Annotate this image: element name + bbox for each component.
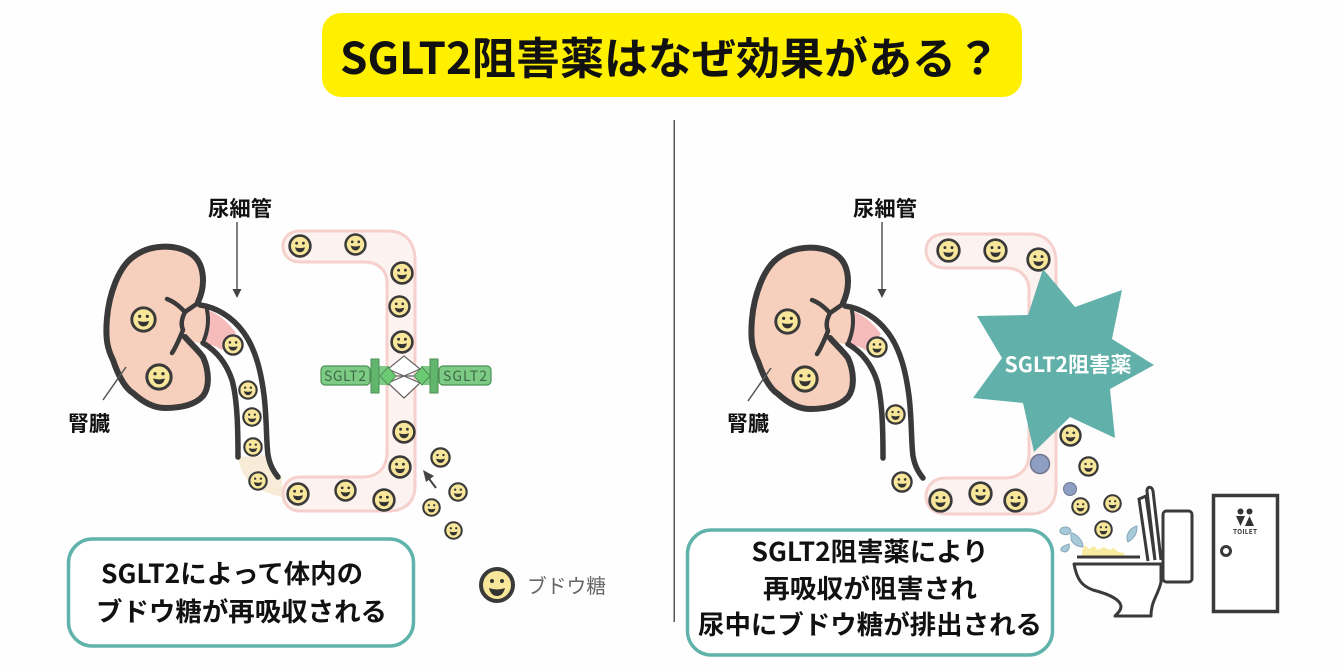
icon: toilet door: [1214, 496, 1278, 612]
SGLT2 transporters: [321, 356, 491, 398]
glucose molecules, right: [776, 240, 1121, 538]
icon: toilet door: TOILET: [1233, 526, 1257, 536]
label: kidney: 腎臓: [68, 408, 110, 438]
label: renal tubule: 尿細管: [853, 193, 917, 223]
label: kidney: [68, 367, 126, 438]
renal tubule: [926, 234, 1056, 514]
arrow: renal tubule pointer: [232, 222, 242, 298]
kidney with ureter: [751, 248, 923, 478]
star: SGLT2 inhibitor: SGLT2阻害薬: [1004, 349, 1132, 379]
callout: SGLT2 reabsorption: ブドウ糖が再吸収される: [96, 592, 387, 629]
callout: SGLT2 reabsorption: SGLT2によって体内の: [101, 554, 363, 591]
label: kidney: [727, 368, 771, 438]
callout: SGLT2 inhibitor effect: 尿中にブドウ糖が排出される: [698, 605, 1042, 642]
label: renal tubule: 尿細管: [208, 193, 272, 223]
callout: SGLT2 reabsorption: [68, 539, 414, 646]
icon: toilet: [1060, 487, 1192, 616]
arrow: reabsorption: [423, 470, 436, 488]
legend: glucose: [481, 569, 606, 601]
SGLT2 transporters: SGLT2: [324, 366, 366, 386]
panel: right, SGLT2 inhibitor: [688, 193, 1278, 655]
callout: SGLT2 inhibitor effect: [688, 530, 1052, 655]
blocked glucose: blue dots: [1030, 454, 1076, 496]
renal tubule: [283, 231, 415, 511]
callout: SGLT2 inhibitor effect: 再吸収が阻害され: [763, 569, 977, 606]
callout: SGLT2 inhibitor effect: SGLT2阻害薬により: [752, 532, 988, 569]
SGLT2 transporters: SGLT2: [443, 366, 487, 386]
glucose molecules, left: [132, 235, 467, 539]
arrow: renal tubule pointer: [878, 222, 886, 298]
kidney with ureter: [106, 247, 282, 497]
title: SGLT2阻害薬はなぜ効果がある？: [340, 23, 1000, 87]
star: SGLT2 inhibitor: [973, 269, 1154, 452]
panel: left, SGLT2 reabsorption: [68, 193, 606, 646]
legend: glucose: ブドウ糖: [527, 570, 606, 599]
label: kidney: 腎臓: [727, 408, 769, 438]
